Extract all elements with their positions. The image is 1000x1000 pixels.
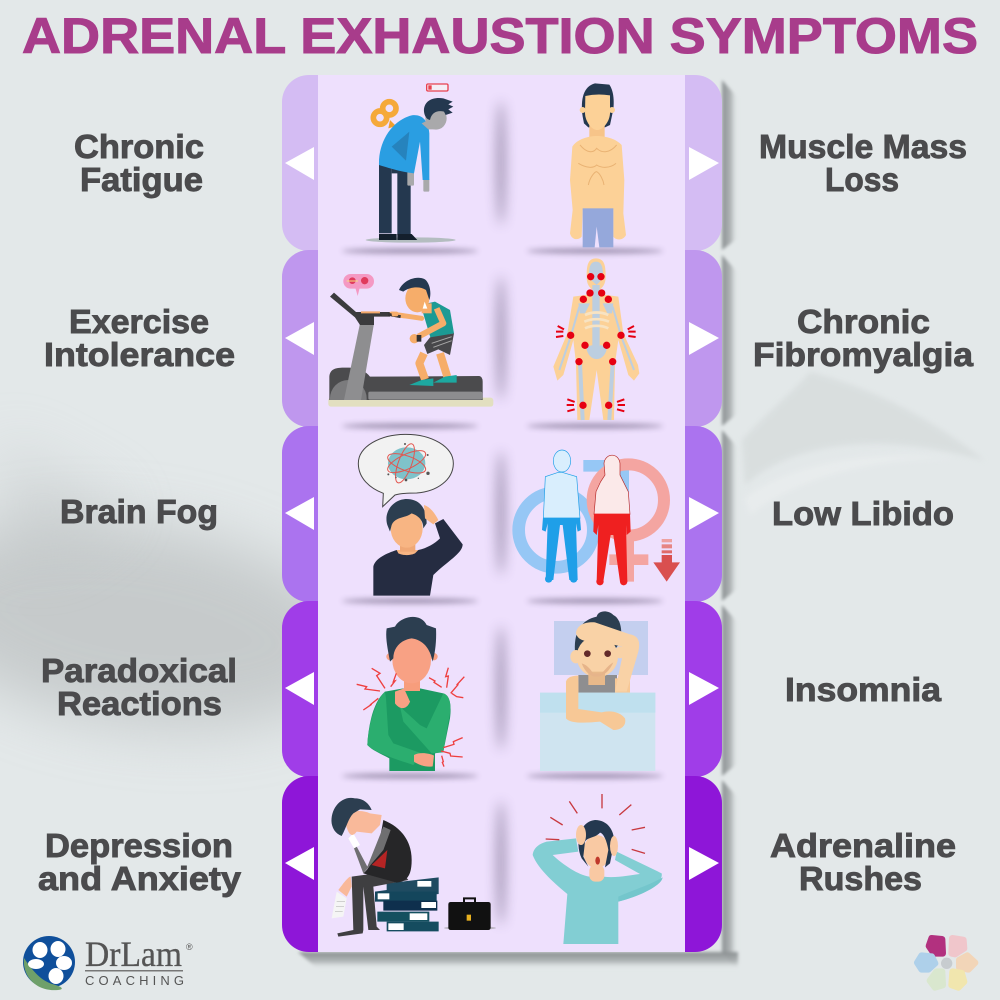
label: depression and anxiety: Depression (45, 827, 233, 864)
label: low libido: Low Libido (772, 495, 954, 532)
icon: tired man with wind-up key (366, 84, 456, 243)
row tab: violet 1 (282, 75, 722, 251)
icon: thin man torso (570, 83, 626, 247)
icon: male and female low libido (519, 450, 680, 585)
illustrations rows 3 and 4 (357, 434, 680, 771)
label: chronic fatigue: Chronic (74, 128, 204, 165)
label: adrenaline rushes: Rushes (799, 860, 922, 897)
center panel (318, 75, 685, 952)
label: insomnia: Insomnia (785, 671, 942, 708)
icon: depressed businessman on folders (332, 798, 439, 937)
label: paradoxical reactions (41, 652, 237, 722)
label: chronic fatigue: Fatigue (80, 161, 203, 198)
label: depression and anxiety (38, 827, 242, 897)
label: paradoxical reactions: Paradoxical (41, 652, 237, 689)
label: muscle mass loss (759, 128, 967, 198)
row tab: violet 2 (282, 250, 722, 427)
illustrations row 5 (332, 794, 663, 944)
icon: insomnia man in bed (540, 611, 655, 771)
label: chronic fibromyalgia: Chronic (797, 303, 930, 340)
logo: pastel flower (917, 938, 975, 987)
icon: man on treadmill (328, 274, 493, 417)
label: paradoxical reactions: Reactions (57, 685, 222, 722)
label: exercise intolerance: Intolerance (44, 336, 235, 373)
label: adrenaline rushes: Adrenaline (770, 827, 956, 864)
label: brain fog: Brain Fog (60, 493, 218, 530)
icon: shocked man holding head (533, 794, 663, 944)
right arrows (689, 147, 719, 880)
card drop shadow (298, 80, 738, 969)
label: exercise intolerance: Exercise (69, 303, 209, 340)
label: chronic fatigue (74, 128, 204, 198)
labels: left column (38, 128, 242, 897)
panel: symptom card (282, 75, 722, 952)
logo: DrLam Coaching (23, 934, 193, 990)
label: muscle mass loss: Loss (825, 161, 899, 198)
row tab: violet 4 (282, 601, 722, 777)
row tab: violet 3 (282, 426, 722, 602)
label: chronic fibromyalgia (753, 303, 974, 373)
icon: black briefcase (444, 898, 496, 930)
left arrows (285, 147, 314, 880)
icon: man with pain reactions (357, 617, 464, 771)
title: ADRENAL EXHAUSTION SYMPTOMS (22, 8, 978, 64)
illustrations rows 1 and 2 (328, 83, 639, 420)
icon: man with brain fog thought bubble (358, 434, 463, 596)
logo: DrLam Coaching: COACHING (85, 973, 184, 988)
label: chronic fibromyalgia: Fibromyalgia (753, 336, 974, 373)
label: muscle mass loss: Muscle Mass (759, 128, 967, 165)
label: adrenaline rushes (770, 827, 956, 897)
labels: right column (753, 128, 974, 897)
label: exercise intolerance (44, 303, 235, 373)
label: depression and anxiety: and Anxiety (38, 860, 242, 897)
row tab: violet 5 (282, 776, 722, 952)
logo: DrLam Coaching: ® (186, 942, 193, 952)
panel shadows (342, 101, 663, 925)
logo: DrLam Coaching: DrLam (85, 934, 182, 974)
icon: fibromyalgia body with pain points (553, 258, 639, 420)
